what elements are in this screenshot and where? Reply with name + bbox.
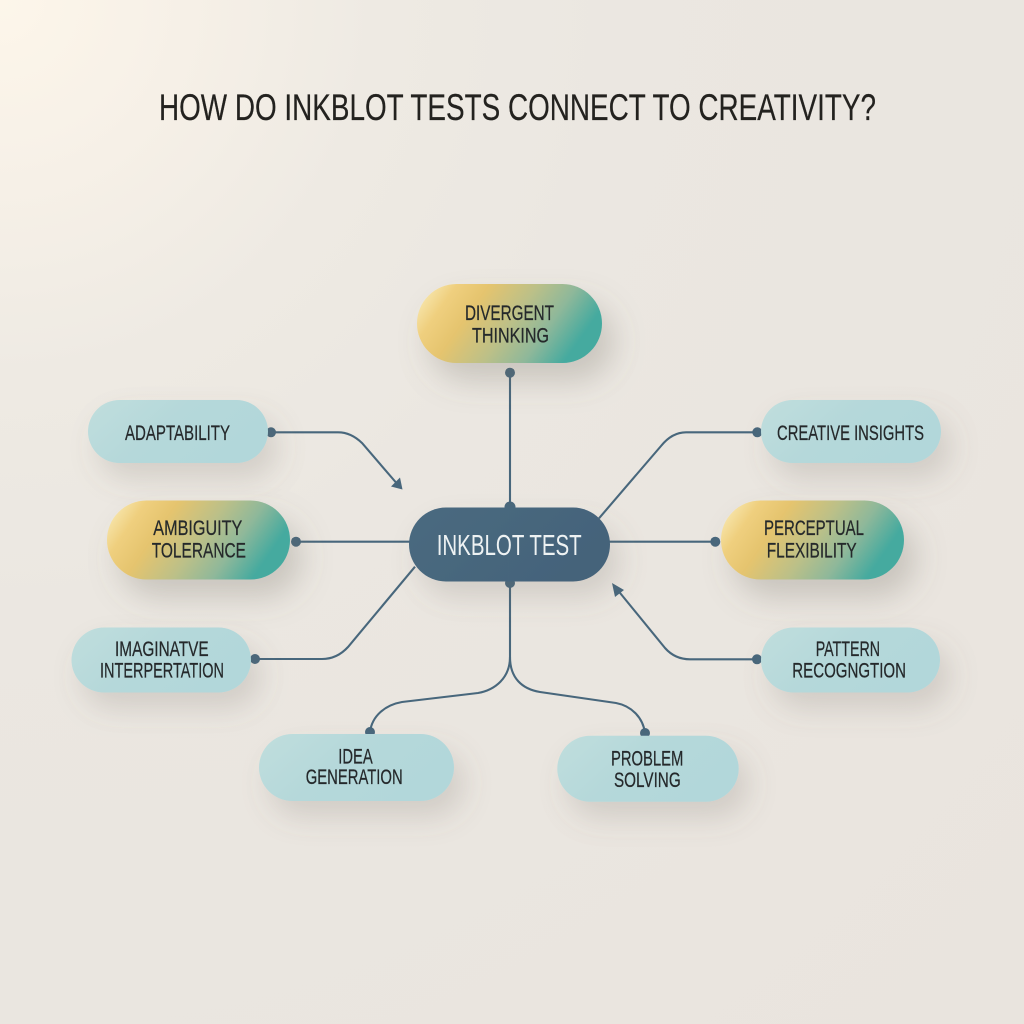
node: pattern recognition: RECOGNGTION: [792, 659, 906, 682]
node: pattern recognition: [761, 628, 940, 692]
node: perceptual flexibility: PERCEPTUAL: [764, 517, 864, 540]
node: divergent thinking: DIVERGENT: [465, 302, 554, 325]
node: imaginative interpretation: INTERPERTATION: [100, 659, 224, 682]
connector: divergent thinking: [504, 368, 516, 512]
node: adaptability: [88, 400, 268, 463]
node: divergent thinking: [417, 284, 602, 363]
node: divergent thinking: THINKING: [472, 324, 549, 347]
node: imaginative interpretation: IMAGINATVE: [115, 638, 209, 661]
node: pattern recognition: PATTERN: [816, 638, 880, 661]
node: adaptability: ADAPTABILITY: [125, 422, 230, 445]
connector: creative insights: [599, 427, 762, 518]
node: problem solving: PROBLEM: [611, 748, 683, 771]
node: problem solving: SOLVING: [614, 769, 681, 792]
node: inkblot test center: [409, 508, 610, 582]
node: imaginative interpretation: [72, 628, 251, 692]
node: inkblot test center: INKBLOT TEST: [437, 530, 582, 562]
connector lines and arrows: [250, 368, 762, 738]
node: idea generation: GENERATION: [306, 766, 403, 789]
connector: idea generation and problem solving: [365, 578, 650, 738]
node: ambiguity tolerance: [107, 500, 290, 580]
node: creative insights: [761, 400, 941, 463]
connector: ambiguity tolerance: [291, 537, 412, 547]
connector: perceptual flexibility: [608, 537, 720, 547]
node: idea generation: [259, 734, 454, 801]
connector: imaginative interpretation: [250, 567, 415, 664]
arrow: adaptability: [266, 427, 402, 490]
arrow: pattern recognition: [612, 583, 762, 664]
node: problem solving: [557, 736, 739, 802]
node: idea generation: IDEA: [338, 745, 373, 768]
node: ambiguity tolerance: AMBIGUITY: [153, 517, 242, 540]
node: creative insights: CREATIVE INSIGHTS: [777, 422, 924, 445]
node: perceptual flexibility: [721, 500, 904, 580]
node: perceptual flexibility: FLEXIBILITY: [767, 539, 857, 562]
node: ambiguity tolerance: TOLERANCE: [152, 539, 246, 562]
